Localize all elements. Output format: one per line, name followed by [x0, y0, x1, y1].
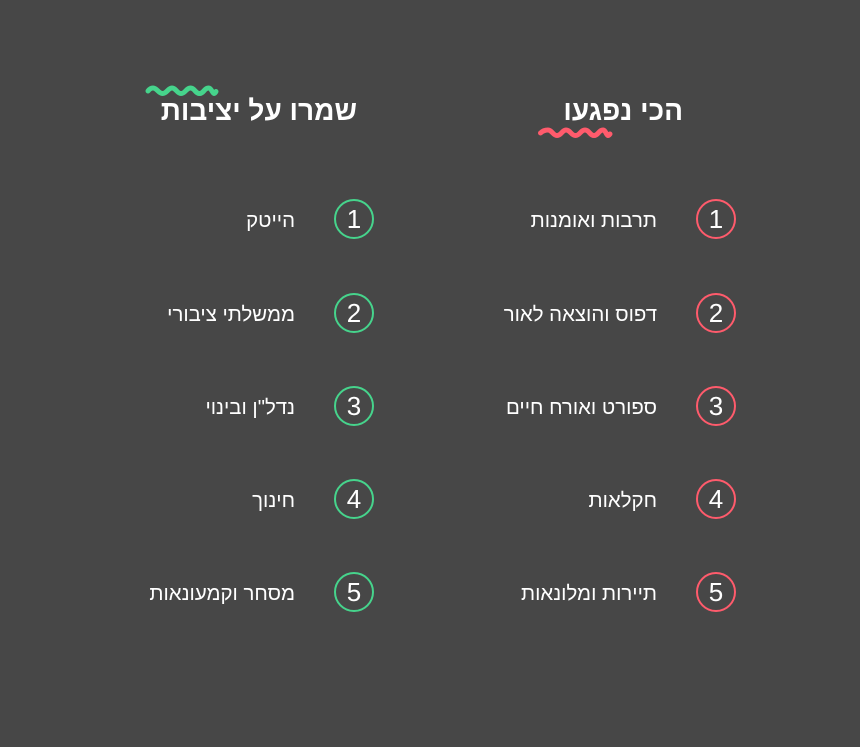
number circle	[334, 199, 374, 239]
number circle	[334, 293, 374, 333]
number circle: 3	[709, 391, 723, 421]
number circle: 3	[347, 391, 361, 421]
number circle: 2	[347, 298, 361, 328]
number circle: 4	[709, 484, 723, 514]
label: ספורט ואורח חיים	[506, 397, 657, 419]
rank 4 row	[252, 479, 374, 519]
panel: stayed stable (left column)	[146, 86, 374, 612]
rank 4 row	[589, 479, 736, 519]
number circle	[696, 386, 736, 426]
rank 3 row	[205, 386, 374, 426]
panel: most affected (right column)	[504, 95, 736, 612]
number circle	[334, 572, 374, 612]
number circle: 1	[347, 204, 361, 234]
rank 5 row	[149, 572, 374, 612]
number circle: 5	[709, 577, 723, 607]
number circle: 1	[709, 204, 723, 234]
label: נדל"ן ובינוי	[205, 397, 295, 419]
number circle	[696, 572, 736, 612]
rank 2 row	[167, 293, 374, 333]
number circle: 4	[347, 484, 361, 514]
heading: most affected: הכי נפגעו	[563, 95, 683, 126]
label: מסחר וקמעונאות	[149, 583, 295, 605]
label: חינוך	[252, 490, 295, 512]
label: ממשלתי ציבורי	[167, 304, 295, 326]
rank 1 row	[531, 199, 736, 239]
number circle: 5	[347, 577, 361, 607]
label: תרבות ואומנות	[531, 210, 657, 232]
heading: stayed stable: שמרו על יציבות	[161, 95, 357, 126]
wavy underline: green	[146, 86, 218, 96]
rank 5 row	[521, 572, 736, 612]
rank 3 row	[506, 386, 736, 426]
rank 2 row	[504, 293, 736, 333]
number circle	[696, 479, 736, 519]
label: חקלאות	[589, 490, 657, 512]
number circle	[696, 293, 736, 333]
number circle: 2	[709, 298, 723, 328]
number circle	[696, 199, 736, 239]
wavy underline: red	[538, 128, 612, 138]
label: דפוס והוצאה לאור	[504, 304, 657, 326]
label: הייטק	[246, 210, 295, 232]
number circle	[334, 479, 374, 519]
rank 1 row	[246, 199, 374, 239]
label: תיירות ומלונאות	[521, 583, 657, 605]
number circle	[334, 386, 374, 426]
